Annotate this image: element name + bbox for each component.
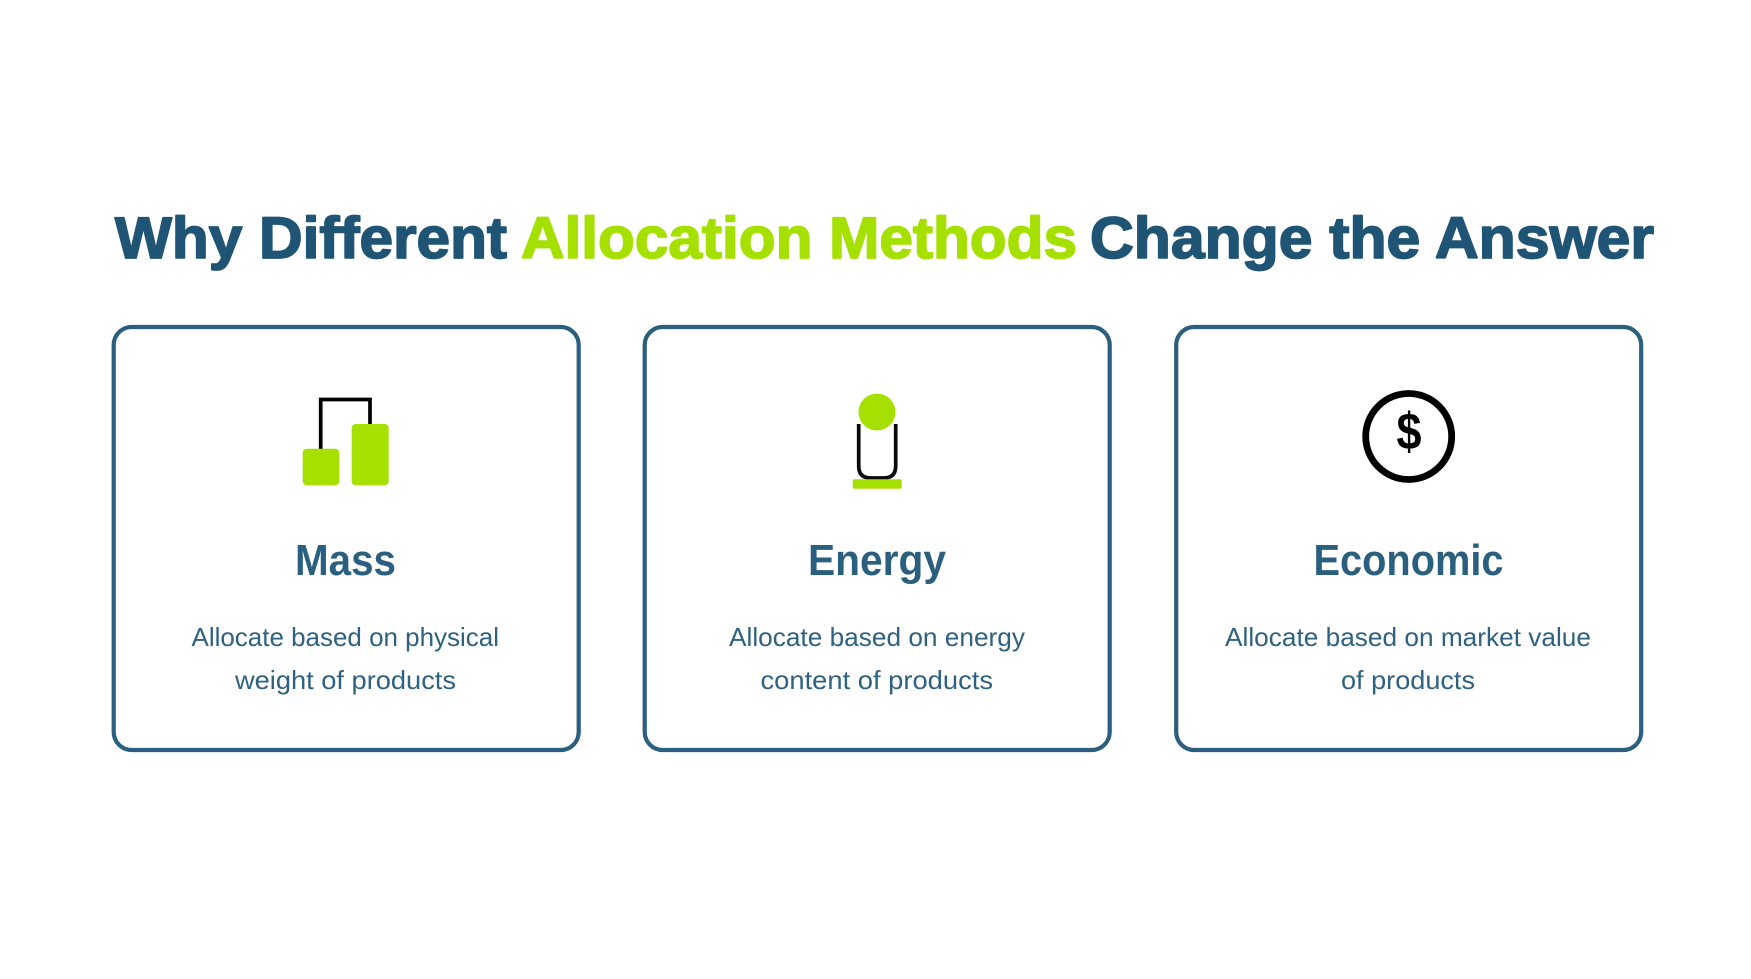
- panel: economic: [1176, 327, 1641, 750]
- icon: energy bulb: [853, 394, 902, 489]
- description: mass: weight of products: [234, 665, 456, 695]
- description: energy: [729, 622, 1025, 695]
- description: energy: Allocate based on energy: [729, 622, 1025, 652]
- card outline: energy: [645, 327, 1110, 750]
- card outline: economic: [1176, 327, 1641, 750]
- heading: mass: Mass: [295, 536, 396, 585]
- heading: energy: Energy: [808, 536, 946, 585]
- description: economic: Allocate based on market value: [1225, 622, 1591, 652]
- icon: dollar coin: [1366, 394, 1452, 480]
- title: Why Different: [115, 206, 507, 271]
- title: Change the Answer: [1090, 206, 1654, 271]
- description: mass: [192, 622, 499, 695]
- heading: economic: Economic: [1314, 536, 1504, 585]
- title: [115, 206, 1654, 271]
- icon: balance blocks: [303, 400, 389, 485]
- title: Allocation Methods: [521, 206, 1077, 271]
- description: mass: Allocate based on physical: [192, 622, 499, 652]
- description: economic: of products: [1341, 665, 1475, 695]
- panel: energy: [645, 327, 1110, 750]
- icon: dollar coin: $: [1396, 403, 1422, 461]
- description: economic: [1225, 622, 1591, 695]
- description: energy: content of products: [760, 665, 993, 695]
- card outline: mass: [114, 327, 579, 750]
- panel: mass: [114, 327, 579, 750]
